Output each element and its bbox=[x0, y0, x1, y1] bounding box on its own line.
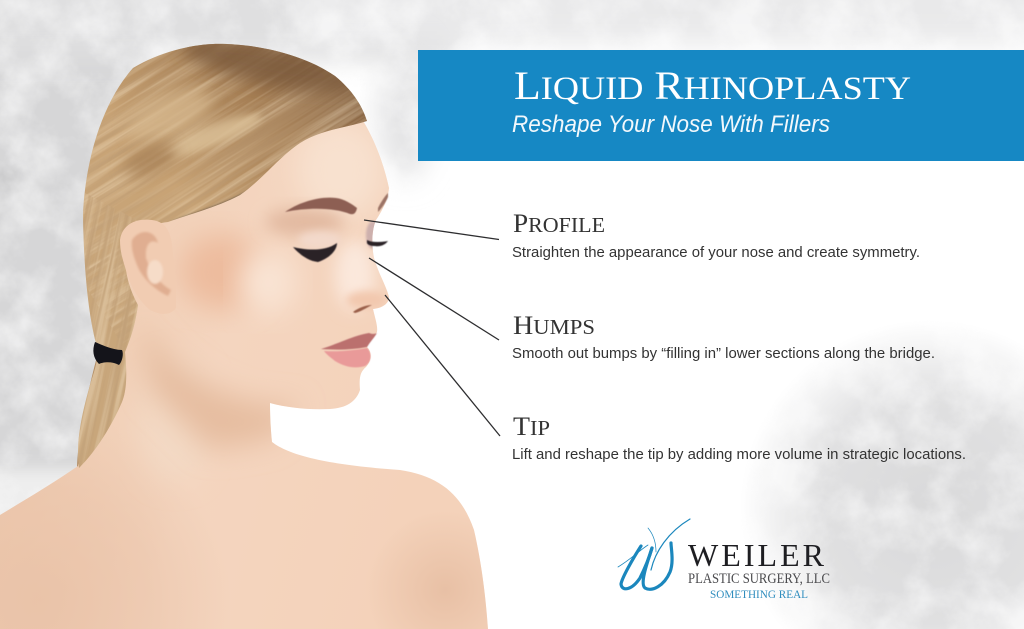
eye with lashes bbox=[293, 240, 388, 262]
ponytail and hair behind the neck bbox=[77, 345, 125, 468]
heading: Liquid Rhinoplasty: LIQUID RHINOPLASTY bbox=[514, 63, 911, 108]
nostril bbox=[353, 305, 372, 313]
subheading: Reshape Your Nose With Fillers bbox=[512, 111, 830, 138]
hair bbox=[78, 44, 367, 468]
woman in profile bbox=[0, 0, 488, 629]
lips bbox=[321, 333, 377, 367]
tagline: SOMETHING REAL bbox=[710, 587, 808, 601]
section: humps: Smooth out bumps by “filling in” lower sections along the bridge. bbox=[512, 345, 935, 362]
section: humps bbox=[512, 311, 935, 362]
skin: face, neck and shoulders bbox=[0, 95, 488, 629]
eyebrow bbox=[285, 193, 388, 214]
section: profile bbox=[512, 209, 920, 261]
hair tie bbox=[93, 342, 123, 365]
section: profile: PROFILE bbox=[513, 209, 605, 238]
section: profile: Straighten the appearance of your nose and create symmetry. bbox=[512, 244, 920, 261]
logo: Weiler Plastic Surgery bbox=[618, 519, 830, 601]
logo icon: W monogram bbox=[618, 519, 690, 589]
company line: PLASTIC SURGERY, LLC bbox=[688, 571, 830, 587]
ear bbox=[120, 220, 176, 314]
pointer line: profile bbox=[364, 220, 499, 240]
section: tip: TIP bbox=[513, 412, 550, 441]
pointer line: humps bbox=[369, 258, 499, 340]
wordmark: WEILER bbox=[688, 537, 825, 573]
section: humps: HUMPS bbox=[513, 311, 595, 340]
pointer line: tip bbox=[385, 295, 500, 436]
section: tip: Lift and reshape the tip by adding more volume in strategic locations. bbox=[512, 446, 966, 463]
title banner bbox=[418, 50, 1024, 161]
section: tip bbox=[512, 412, 966, 463]
